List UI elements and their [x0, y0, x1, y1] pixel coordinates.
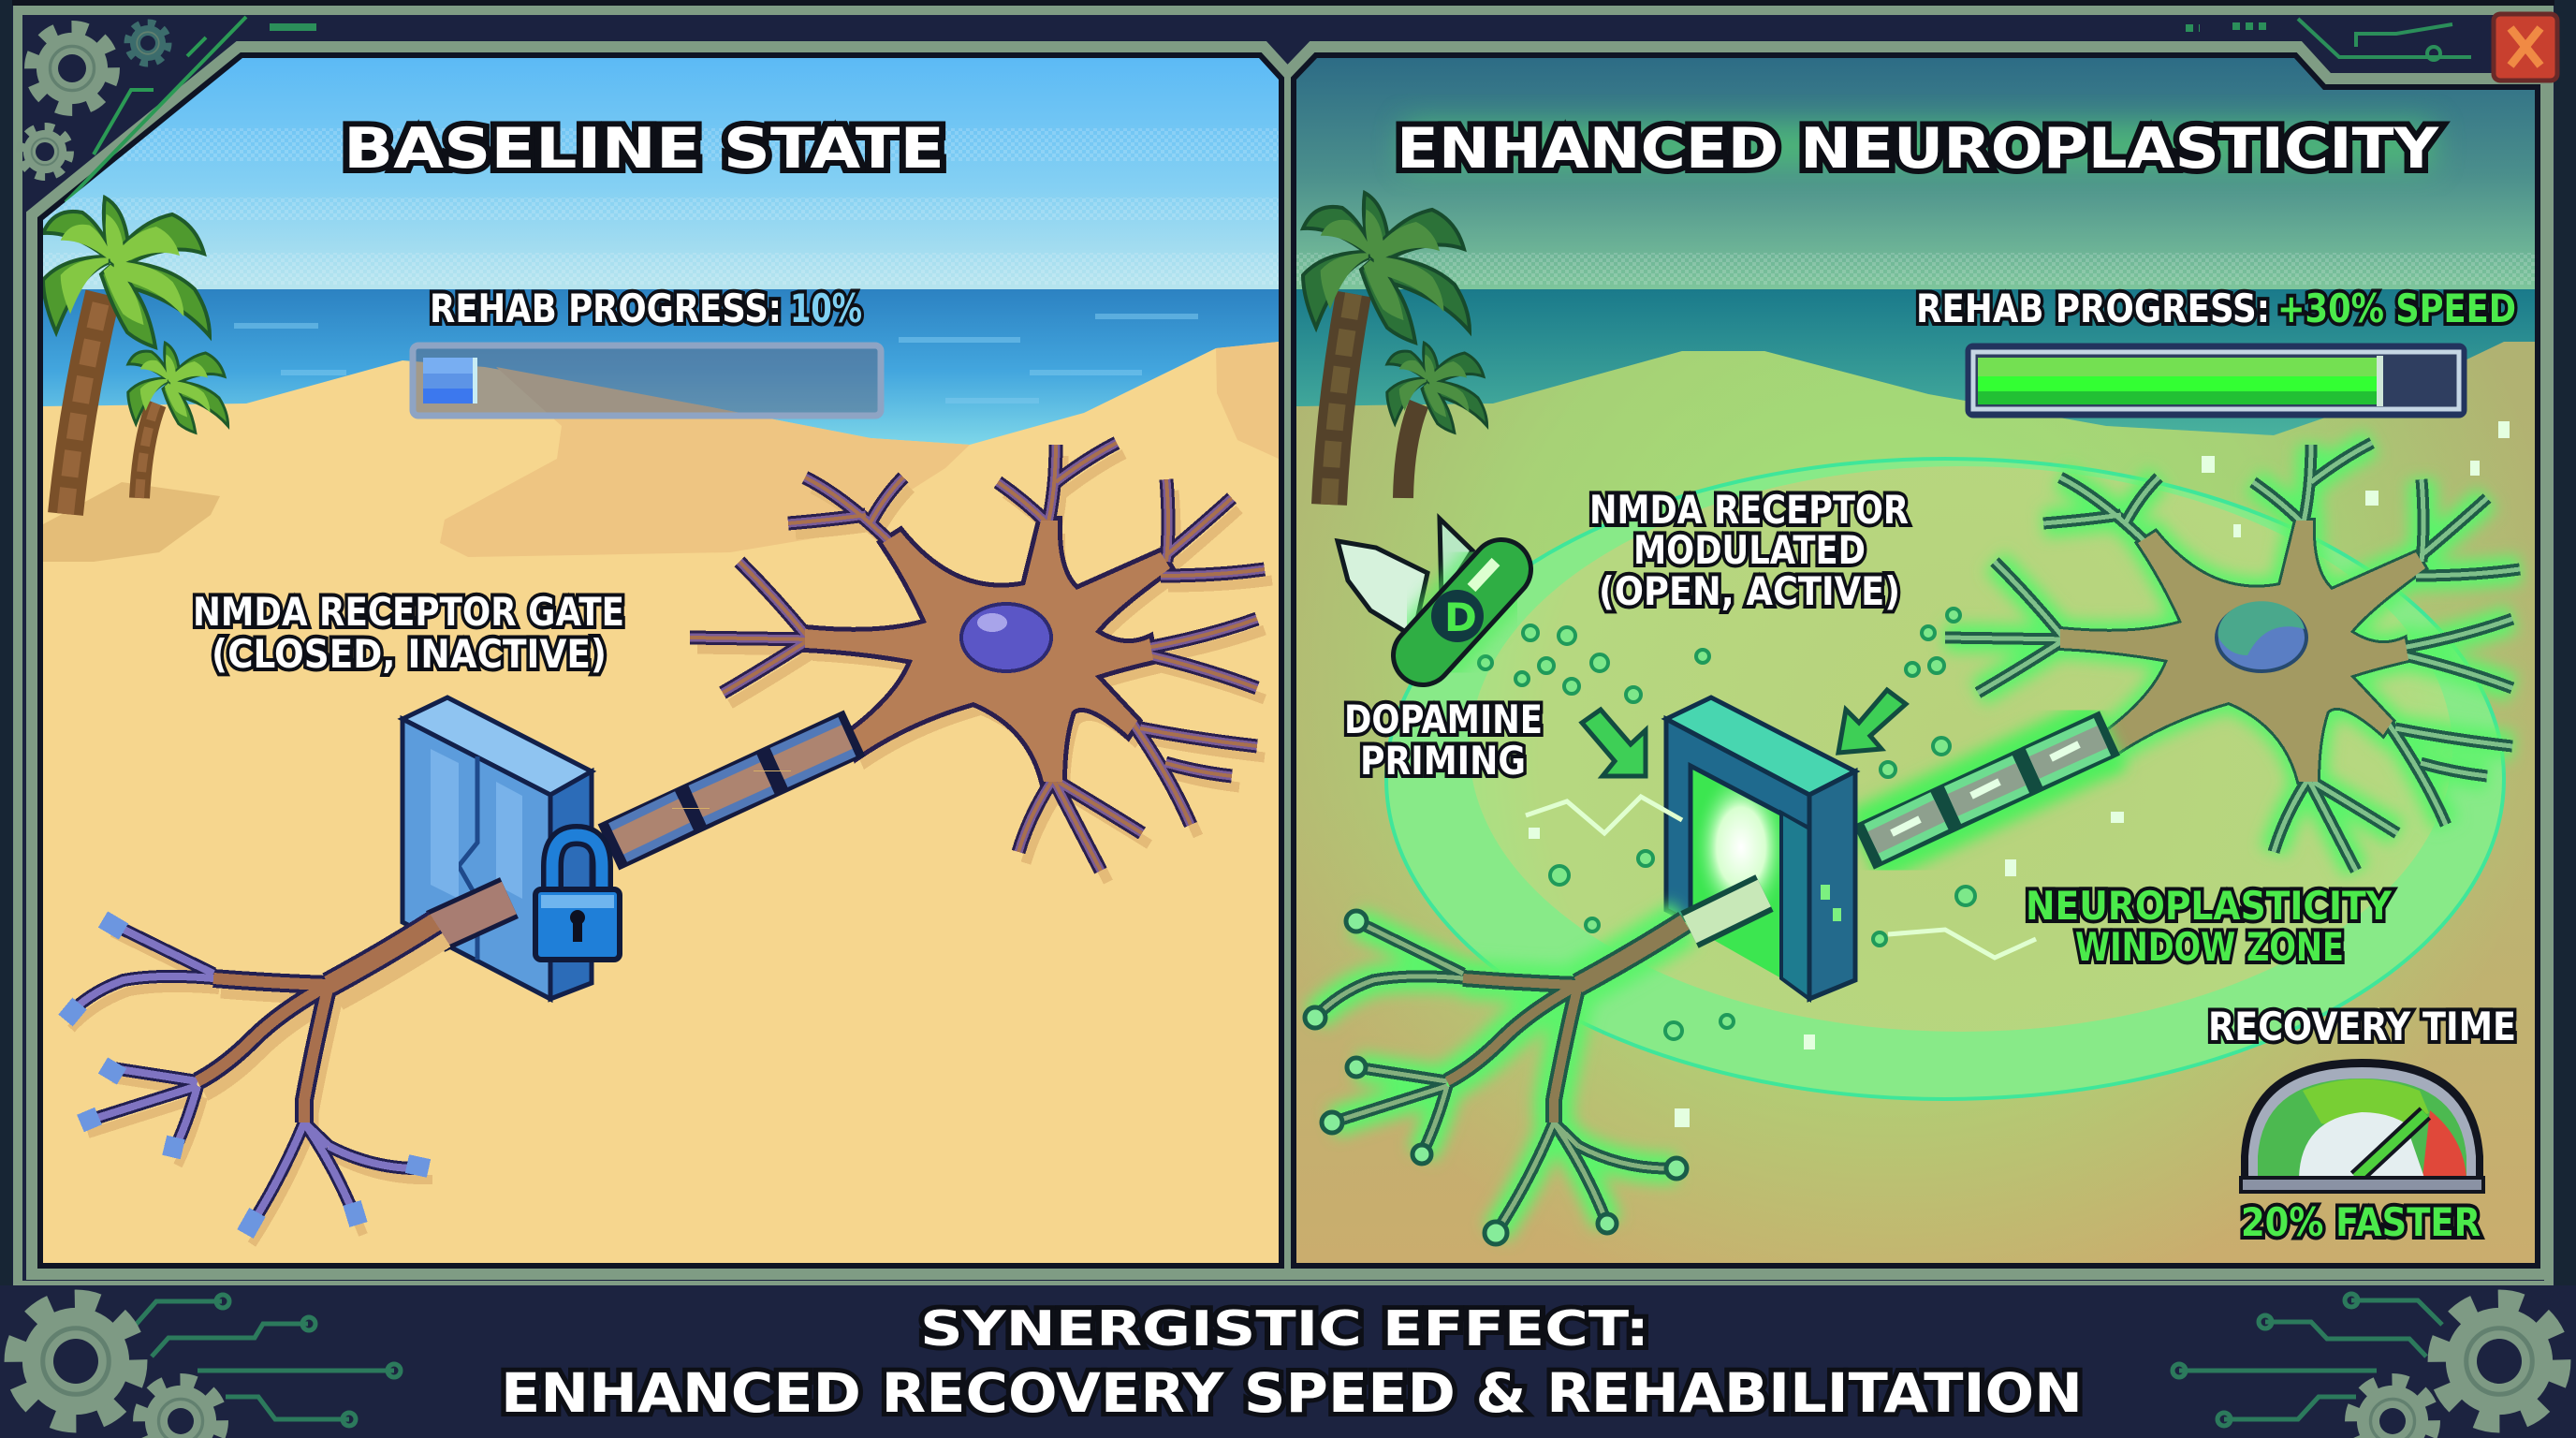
sea	[43, 289, 1279, 453]
neuron: myelinated axon	[608, 733, 855, 847]
label: dopamine priming: PRIMING	[1360, 738, 1526, 784]
footer decoration: left gears and circuits	[14, 1295, 401, 1438]
sand beach with glow	[1296, 337, 2535, 1263]
sky	[1296, 58, 2535, 292]
NMDA gate: closed blue block	[402, 697, 592, 999]
palm trees	[1303, 193, 1487, 505]
label: dopamine priming	[1344, 697, 1543, 784]
label: neuroplasticity window zone: WINDOW ZONE	[2075, 924, 2344, 970]
icon: close button	[2494, 14, 2557, 81]
heading: enhanced neuroplasticity: ENHANCED NEUROPLASTICITY	[1397, 116, 2440, 182]
label: 20% faster: 20% FASTER	[2241, 1199, 2481, 1245]
label: rehab progress 10%: REHAB PROGRESS:	[430, 286, 782, 331]
label: NMDA receptor gate: (CLOSED, INACTIVE)	[212, 631, 607, 677]
label: NMDA receptor gate: NMDA RECEPTOR GATE	[193, 589, 624, 635]
label: rehab progress +30% speed	[1915, 288, 2518, 326]
label: dopamine priming: DOPAMINE	[1344, 697, 1543, 742]
sky	[43, 58, 1279, 292]
progress bar: 10%	[413, 345, 881, 416]
footer title: synergistic effect: SYNERGISTIC EFFECT:	[920, 1301, 1649, 1357]
footer title: synergistic effect: ENHANCED RECOVERY SPEED & REHABILITATION	[501, 1361, 2083, 1425]
label: NMDA receptor gate	[193, 589, 624, 677]
neuron: soma and dendrites	[690, 443, 1272, 882]
frame decoration: top-left gears and circuits	[20, 17, 316, 202]
footer title: synergistic effect	[501, 1301, 2083, 1425]
label: rehab progress +30% speed: +30% SPEED	[2277, 286, 2516, 331]
label: neuroplasticity window zone	[2026, 883, 2393, 970]
heading: baseline state: BASELINE STATE	[344, 116, 944, 182]
neuroplasticity window zone ring	[1386, 459, 2504, 1099]
label: rehab progress 10%: 10%	[790, 286, 862, 331]
icon: winged dopamine pill	[1338, 519, 1501, 655]
sand beach	[43, 342, 1279, 1263]
label: NMDA receptor modulated: (OPEN, ACTIVE)	[1599, 568, 1900, 614]
neuron: soma and dendrites with glow	[1945, 443, 2520, 871]
frame decoration: top-right circuits	[2186, 19, 2471, 60]
sea	[1296, 289, 2535, 435]
neuron: lower dendrites	[66, 919, 445, 1244]
neuron: glowing myelinated axon	[1864, 733, 2110, 847]
palm trees	[43, 198, 228, 514]
panel: baseline state	[43, 58, 1279, 1263]
icon: green arrow to gate (left)	[1582, 710, 1646, 776]
recovery time gauge	[2241, 1059, 2483, 1192]
icon: green arrow to gate (right)	[1838, 690, 1906, 753]
label: recovery time: RECOVERY TIME	[2208, 1004, 2516, 1049]
label: NMDA receptor modulated: NMDA RECEPTOR	[1589, 487, 1909, 533]
progress bar: +30% speed	[1969, 346, 2464, 415]
icon: padlock	[535, 835, 620, 960]
icon: winged dopamine pill: D	[1444, 594, 1477, 640]
NMDA gate: open teal arch	[1666, 697, 1855, 999]
icon: dopamine particles	[1479, 609, 1975, 1039]
label: rehab progress +30% speed: REHAB PROGRESS:	[1916, 286, 2270, 331]
label: NMDA receptor modulated: MODULATED	[1633, 527, 1866, 573]
label: neuroplasticity window zone: NEUROPLASTICITY	[2026, 883, 2393, 929]
label: NMDA receptor modulated	[1589, 487, 1909, 614]
footer decoration: right gears and circuits	[2173, 1294, 2561, 1438]
panel: enhanced neuroplasticity	[1296, 58, 2535, 1263]
sparkles and lightning	[1526, 421, 2510, 1127]
neuron: lower dendrites with glow	[1305, 893, 1764, 1244]
